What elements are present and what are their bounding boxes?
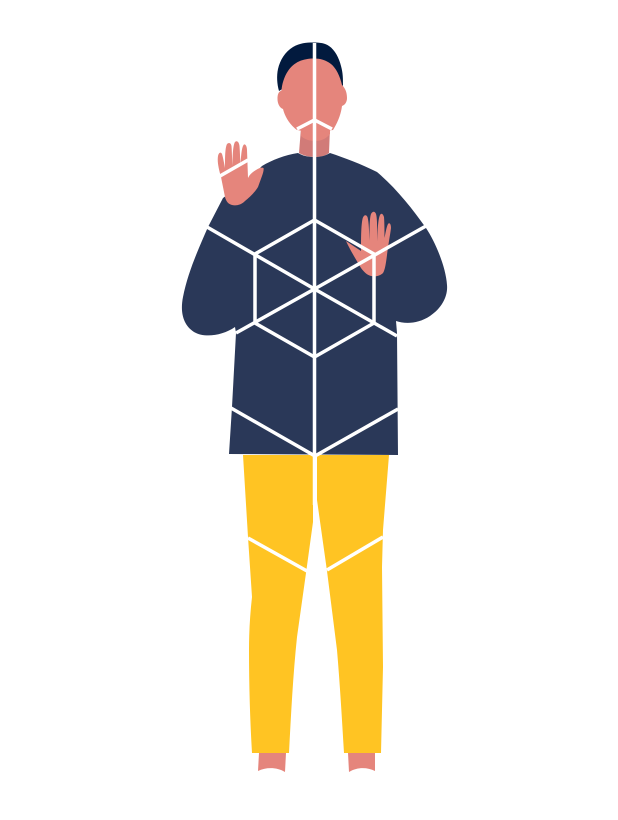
hair (277, 42, 343, 91)
right foot (348, 753, 375, 772)
trousers right leg (317, 455, 389, 753)
neck (299, 128, 330, 157)
face (278, 58, 347, 133)
neck upper highlight (301, 128, 330, 141)
left hand (218, 141, 264, 205)
jacket (182, 153, 447, 455)
hexagon line overlay (207, 43, 426, 571)
left foot (258, 753, 286, 772)
trousers left leg (243, 455, 313, 753)
right hand (346, 212, 391, 276)
